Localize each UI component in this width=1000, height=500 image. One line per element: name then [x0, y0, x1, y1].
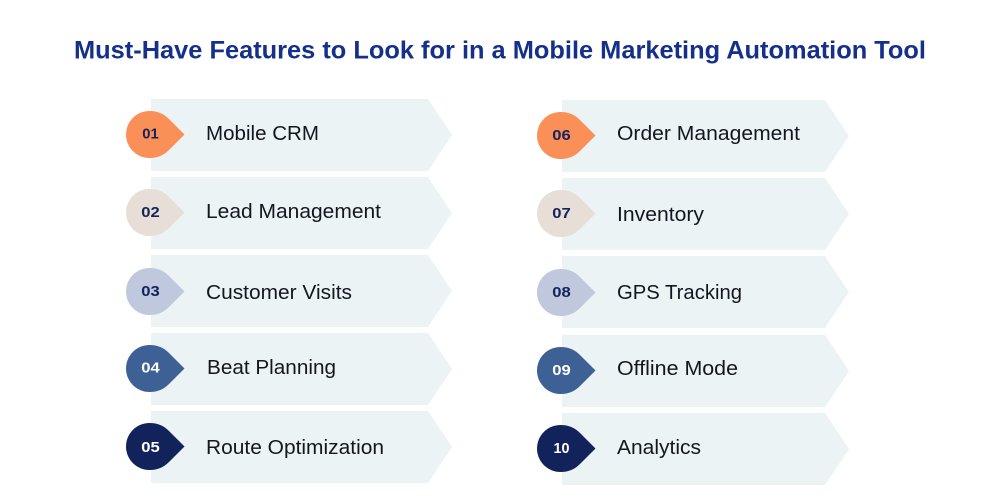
feature 05: Route Optimization: 05 — [141, 440, 160, 456]
feature 07: Inventory — [537, 178, 849, 250]
feature 04: Beat Planning — [126, 333, 452, 405]
feature 02: Lead Management: Lead Management — [206, 201, 381, 223]
feature 06: Order Management — [537, 100, 849, 172]
feature 10: Analytics — [537, 413, 849, 485]
feature 04: Beat Planning: 04 — [141, 361, 160, 377]
feature 03: Customer Visits: 03 — [141, 284, 160, 300]
feature 10: Analytics: Analytics — [617, 437, 701, 459]
feature 02: Lead Management: 02 — [141, 205, 160, 221]
feature 09: Offline Mode: 09 — [552, 363, 571, 379]
feature 01: Mobile CRM: 01 — [142, 126, 159, 142]
feature 08: GPS Tracking: 08 — [552, 285, 571, 301]
feature 06: Order Management: 06 — [552, 128, 571, 144]
title: Must-Have Features to Look for in a Mobile Marketing Automation Tool — [74, 36, 926, 64]
feature 05: Route Optimization — [126, 411, 452, 483]
feature 03: Customer Visits: Customer Visits — [206, 282, 352, 304]
feature 05: Route Optimization: Route Optimization — [206, 437, 384, 459]
feature 03: Customer Visits — [126, 255, 452, 327]
feature 04: Beat Planning: Beat Planning — [207, 357, 336, 379]
feature 09: Offline Mode — [537, 335, 849, 407]
feature 07: Inventory: 07 — [552, 206, 571, 222]
feature 09: Offline Mode: Offline Mode — [617, 358, 738, 380]
feature 02: Lead Management — [126, 177, 452, 249]
feature 06: Order Management: Order Management — [617, 123, 800, 145]
feature 01: Mobile CRM — [126, 99, 452, 171]
feature 01: Mobile CRM: Mobile CRM — [206, 123, 319, 145]
feature 08: GPS Tracking — [537, 256, 849, 328]
feature 07: Inventory: Inventory — [617, 204, 704, 226]
feature 08: GPS Tracking: GPS Tracking — [617, 282, 742, 304]
feature 10: Analytics: 10 — [554, 441, 570, 457]
